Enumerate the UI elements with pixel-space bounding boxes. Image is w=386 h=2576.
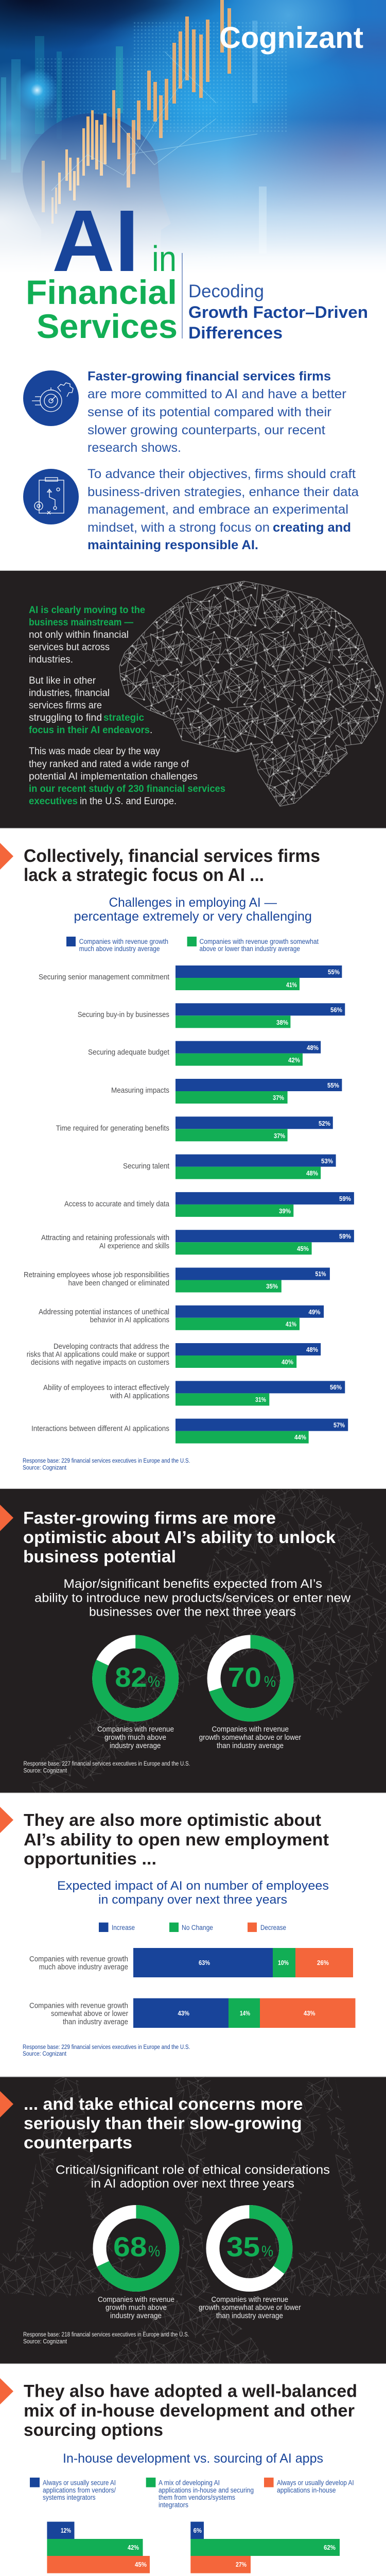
chart row labels: Securing adequate budget: [88, 1048, 169, 1057]
bar chart: challenges in employing AI: 56%: [330, 1383, 342, 1391]
text: intro paragraph 2: maintaining responsible AI.: [87, 538, 258, 552]
bar chart: slower-growing sourcing mix: [190, 2522, 340, 2576]
legend: sourcing chart: A mix of developing AI: [159, 2479, 220, 2487]
text: intro paragraph 1: research shows.: [87, 440, 181, 455]
donut chart: 68%: [99, 2212, 172, 2285]
caption: donut 35%: Companies with revenue: [211, 2296, 288, 2304]
legend: sourcing chart: Always or usually secure AI: [43, 2479, 116, 2487]
caption: donut 35%: [199, 2296, 301, 2320]
bar chart: faster-growing sourcing mix: 42%: [128, 2544, 139, 2551]
legend: sourcing chart: systems integrators: [43, 2494, 96, 2501]
subtitle: Differences: [188, 324, 283, 342]
legend: sourcing chart: [30, 2478, 354, 2509]
legend: sourcing chart: applications in-house: [277, 2486, 336, 2494]
caption: donut 68%: [98, 2296, 174, 2320]
bar chart: challenges in employing AI: 52%: [319, 1120, 330, 1127]
bar chart: challenges in employing AI: 49%: [309, 1308, 321, 1316]
legend: employees chart: [99, 1923, 286, 1932]
bar chart: faster-growing sourcing mix: 45%: [135, 2561, 147, 2568]
caption: donut 35%: than industry average: [216, 2312, 283, 2320]
chart title: employees: in company over next three years: [98, 1893, 287, 1907]
arrow: section 3 marker: [0, 1807, 13, 1833]
chart row labels: Access to accurate and timely data: [64, 1200, 170, 1209]
chart title: sourcing: In-house development vs. sourcing of AI apps: [63, 2451, 323, 2466]
text: intro paragraph 1: slower growing counterparts, our recent: [87, 423, 325, 437]
caption: donut 68%: growth much above: [106, 2304, 167, 2312]
chart row labels: Time required for generating benefits: [56, 1125, 169, 1133]
bar chart: challenges in employing AI: 37%: [273, 1094, 284, 1101]
text: AI mainstream copy: struggling to find: [29, 713, 102, 723]
heading: ethical concerns: ... and take ethical concerns more: [24, 2094, 303, 2113]
stacked bar chart: expected employee impact: 63%: [199, 1959, 210, 1967]
caption: donut 82%: [97, 1725, 174, 1750]
text: AI mainstream copy: industries.: [29, 654, 73, 665]
chart title: benefits: ability to introduce new products/services or enter new: [34, 1591, 351, 1605]
source note: ethics: Source: Cognizant: [23, 2339, 67, 2345]
bar chart: challenges in employing AI: 48%: [307, 1044, 319, 1052]
bar chart: challenges in employing AI: 41%: [286, 981, 297, 989]
title: AI in Financial Services: [26, 192, 178, 345]
stacked bar row labels: [29, 1955, 128, 2026]
source note: challenges chart: [23, 1458, 190, 1471]
donut chart: 35%: 35: [226, 2232, 260, 2263]
text: AI mainstream copy: services but across: [29, 642, 110, 653]
text: intro paragraph 1: Faster-growing financial services firms: [87, 369, 331, 383]
chart row labels: Developing contracts that address the: [54, 1343, 169, 1351]
donut chart: 35%: %: [261, 2243, 273, 2260]
text: intro paragraph 2: business-driven strategies, enhance their data: [87, 485, 359, 499]
text: AI mainstream copy: executives: [29, 796, 78, 807]
stacked bar chart: expected employee impact: 43%: [304, 2009, 315, 2017]
heading: sourcing mix: mix of in-house development and other: [24, 2401, 355, 2421]
bar chart: challenges in employing AI: 42%: [288, 1056, 300, 1064]
chart row labels: Attracting and retaining professionals with: [41, 1234, 169, 1242]
bar chart: challenges in employing AI: 40%: [282, 1358, 293, 1366]
arrow: section 2 marker: [0, 1504, 13, 1531]
title: AI in Financial Services: Financial: [26, 273, 177, 311]
stacked bar chart: expected employee impact: [29, 1948, 355, 2028]
stacked bar row labels: somewhat above or lower: [51, 2010, 128, 2018]
legend: challenges chart: much above industry average: [79, 945, 160, 953]
heading: ethical concerns: counterparts: [24, 2133, 132, 2152]
heading: ethical concerns: seriously than their slow-growing: [24, 2114, 302, 2133]
caption: donut 70%: [199, 1725, 301, 1750]
chart row labels: risks that AI applications could make or support: [27, 1351, 169, 1359]
chart row labels: Ability of employees to interact effectively: [43, 1384, 170, 1392]
bar chart: challenges in employing AI: 41%: [286, 1320, 296, 1328]
title: AI in Financial Services: AI: [52, 192, 139, 290]
text: AI mainstream copy: industries, financial: [29, 688, 110, 699]
heading: strategic focus: lack a strategic focus on AI ...: [24, 865, 264, 885]
chart row labels: Retraining employees whose job responsibilities: [24, 1271, 169, 1279]
chart title: ethics: [56, 2163, 330, 2191]
legend: employees chart: Increase: [112, 1924, 135, 1931]
bar chart: challenges in employing AI: 51%: [315, 1270, 326, 1278]
caption: donut 35%: growth somewhat above or lower: [199, 2304, 301, 2312]
chart title: ethics: in AI adoption over next three years: [91, 2177, 294, 2191]
source note: employees: Source: Cognizant: [23, 2051, 67, 2057]
chart row labels: with AI applications: [110, 1392, 169, 1400]
head silhouette: [23, 113, 171, 273]
chart title: challenges: [74, 895, 312, 924]
text: AI mainstream copy: But like in other: [29, 675, 96, 686]
chart row labels: have been changed or eliminated: [68, 1279, 169, 1287]
source note: benefits: [24, 1761, 190, 1774]
title: AI in Financial Services: Services: [37, 307, 178, 345]
bar chart: challenges in employing AI: 56%: [330, 1006, 342, 1014]
legend: challenges chart: Companies with revenue growth somewhat: [200, 938, 319, 945]
source note: challenges chart: Response base: 229 financial services executives in Europe and the U.S.: [23, 1458, 190, 1464]
chart title: benefits: businesses over the next three years: [89, 1605, 296, 1619]
heading: ethical concerns: [24, 2094, 303, 2152]
text: AI mainstream copy: potential AI implementation challenges: [29, 771, 198, 782]
panel: dark brain intro: [0, 570, 386, 828]
caption: donut 68%: Companies with revenue: [98, 2296, 174, 2304]
donut chart: 70%: %: [264, 1673, 276, 1690]
bar chart: challenges in employing AI: 39%: [279, 1207, 291, 1215]
bar chart: challenges in employing AI: 55%: [328, 968, 340, 976]
chart title: benefits: Major/significant benefits expected from AI’s: [63, 1577, 322, 1591]
legend: employees chart: No Change: [182, 1924, 213, 1931]
title: AI in Financial Services: in: [152, 239, 177, 279]
panel: dark ethical concerns: [0, 2076, 386, 2364]
heading: employment opportunities: opportunities ...: [24, 1849, 156, 1868]
icon: speed gauge and gear: [23, 370, 79, 426]
heading: employment opportunities: They are also more optimistic about: [24, 1810, 321, 1829]
chart row labels: behavior in AI applications: [90, 1316, 169, 1324]
chart title: benefits: [34, 1577, 351, 1619]
text: AI mainstream copy: AI is clearly moving to the: [29, 605, 145, 616]
donut chart: 70%: 70: [228, 1662, 261, 1693]
source note: ethics: Response base: 218 financial services executives in Europe and the U.S.: [23, 2332, 189, 2338]
stacked bar chart: expected employee impact: 26%: [317, 1959, 329, 1967]
legend: employees chart: Decrease: [260, 1924, 286, 1931]
caption: donut 68%: industry average: [110, 2312, 162, 2320]
text: intro paragraph 2: mindset, with a strong focus on: [87, 520, 270, 535]
chart row labels: decisions with negative impacts on customers: [31, 1359, 169, 1367]
caption: donut 82%: growth much above: [104, 1734, 166, 1742]
bar chart: challenges in employing AI: 57%: [334, 1421, 345, 1429]
stacked bar chart: expected employee impact: 10%: [278, 1959, 289, 1967]
text: AI mainstream copy: [29, 605, 225, 807]
bar chart: faster-growing sourcing mix: 12%: [61, 2527, 71, 2534]
donut chart: 68%: %: [148, 2243, 160, 2260]
text: intro paragraph 1: sense of its potential compared with their: [87, 405, 331, 419]
chart row labels: Securing buy-in by businesses: [78, 1011, 169, 1019]
chart row labels: Addressing potential instances of unethical: [39, 1308, 169, 1316]
subtitle: Growth Factor–Driven: [188, 303, 368, 321]
logo: Cognizant: Cognizant: [219, 21, 363, 55]
chart row labels: Interactions between different AI applications: [31, 1425, 169, 1433]
bar chart: challenges in employing AI: [24, 965, 354, 1444]
legend: sourcing chart: applications from vendors/: [43, 2486, 116, 2494]
heading: employment opportunities: [24, 1810, 329, 1868]
source note: benefits: Source: Cognizant: [24, 1768, 67, 1774]
bar chart: slower-growing sourcing mix: 62%: [324, 2544, 336, 2551]
donut chart: 82%: [99, 1641, 172, 1715]
bar chart: slower-growing sourcing mix: 6%: [194, 2527, 202, 2534]
text: AI mainstream copy: they ranked and rated a wide range of: [29, 759, 189, 770]
text: intro paragraph 1: are more committed to AI and have a better: [87, 387, 346, 401]
text: AI mainstream copy: in our recent study of 230 financial services: [29, 784, 225, 794]
chart row labels: Measuring impacts: [111, 1087, 169, 1095]
text: AI mainstream copy: focus in their AI endeavors: [29, 725, 150, 736]
stacked bar row labels: than industry average: [63, 2018, 128, 2026]
chart row labels: Securing senior management commitment: [39, 973, 169, 981]
source note: challenges chart: Source: Cognizant: [23, 1465, 67, 1471]
source note: employees: [23, 2044, 190, 2057]
brain network illustration: [116, 577, 386, 809]
source note: ethics: [23, 2332, 189, 2345]
stacked bar row labels: Companies with revenue growth: [29, 1955, 128, 1963]
chart title: ethics: Critical/significant role of ethical considerations: [56, 2163, 330, 2177]
bar chart: challenges in employing AI: 31%: [255, 1396, 266, 1403]
text: AI mainstream copy: in the U.S. and Europe.: [80, 796, 177, 807]
text: intro paragraph 2: management, and embrace an experimental: [87, 502, 348, 517]
bar chart: faster-growing sourcing mix: [47, 2522, 165, 2576]
legend: sourcing chart: applications in-house and securing: [159, 2486, 254, 2494]
donut chart: 68%: 68: [113, 2232, 147, 2263]
text: AI mainstream copy: services firms are: [29, 700, 102, 711]
heading: employment opportunities: AI’s ability to open new employment: [24, 1830, 329, 1849]
heading: faster-growing firms: optimistic about AI’s ability to unlock: [23, 1528, 336, 1547]
arrow: section 4 marker: [0, 2091, 13, 2117]
stacked bar chart: expected employee impact: 14%: [240, 2009, 250, 2017]
chart title: challenges: percentage extremely or very challenging: [74, 909, 312, 924]
donut chart: 82%: %: [148, 1673, 160, 1690]
text: AI mainstream copy: business mainstream —: [29, 617, 133, 628]
heading: sourcing mix: They also have adopted a well-balanced: [24, 2382, 357, 2401]
stacked bar row labels: Companies with revenue growth: [29, 2002, 128, 2010]
hero image: financial charts and head: [0, 0, 386, 324]
chart row labels: Securing talent: [123, 1162, 169, 1171]
text: intro paragraph 2: creating and: [273, 520, 351, 535]
donut chart: 70%: [214, 1641, 287, 1715]
text: AI mainstream copy: strategic: [103, 713, 144, 723]
bar chart: challenges in employing AI: 55%: [327, 1081, 339, 1089]
bar chart: challenges in employing AI: 45%: [297, 1245, 309, 1252]
chart row labels: AI experience and skills: [99, 1242, 169, 1250]
donut chart: 82%: 82: [115, 1662, 147, 1693]
stacked bar row labels: much above industry average: [39, 1963, 128, 1971]
text: intro paragraph 2: [87, 467, 359, 552]
legend: sourcing chart: Always or usually develop AI: [277, 2479, 354, 2487]
caption: donut 82%: Companies with revenue: [97, 1725, 174, 1734]
caption: donut 70%: growth somewhat above or lower: [199, 1734, 301, 1742]
chart title: employees: [57, 1879, 329, 1907]
bar chart: challenges in employing AI: 35%: [266, 1282, 278, 1290]
text: intro paragraph 2: To advance their objectives, firms should craft: [87, 467, 356, 481]
caption: donut 82%: industry average: [110, 1742, 161, 1750]
text: AI mainstream copy: .: [150, 725, 152, 736]
subtitle: Decoding: [188, 281, 264, 301]
heading: strategic focus: [24, 846, 320, 885]
chart title: challenges: Challenges in employing AI —: [109, 895, 277, 910]
source note: employees: Response base: 229 financial services executives in Europe and the U.S.: [23, 2044, 190, 2050]
bar chart: challenges in employing AI: 37%: [274, 1132, 285, 1140]
heading: faster-growing firms: Faster-growing firms are more: [23, 1509, 276, 1528]
bar chart: challenges in employing AI: 48%: [306, 1170, 318, 1177]
legend: sourcing chart: integrators: [159, 2501, 188, 2509]
caption: donut 70%: than industry average: [217, 1742, 284, 1750]
heading: faster-growing firms: [23, 1509, 336, 1566]
bar chart: slower-growing sourcing mix: 27%: [236, 2561, 247, 2568]
heading: faster-growing firms: business potential: [23, 1547, 176, 1566]
bar chart: challenges in employing AI: 53%: [321, 1157, 333, 1165]
legend: challenges chart: above or lower than industry average: [200, 945, 300, 953]
bar chart: challenges in employing AI: 59%: [339, 1195, 351, 1202]
text: intro paragraph 1: [87, 369, 346, 455]
subtitle: [188, 281, 368, 342]
source note: benefits: Response base: 227 financial services executives in Europe and the U.S.: [24, 1761, 190, 1767]
bar chart: challenges in employing AI: 48%: [306, 1346, 318, 1353]
heading: sourcing mix: sourcing options: [24, 2420, 163, 2440]
arrow: section 5 marker: [0, 2378, 13, 2404]
legend: sourcing chart: them from vendors/systems: [159, 2494, 235, 2501]
chart title: employees: Expected impact of AI on number of employees: [57, 1879, 329, 1893]
bar chart: challenges in employing AI: 44%: [294, 1433, 306, 1441]
donut chart: 35%: [213, 2212, 286, 2285]
panel: dark optimistic business potential: [0, 1488, 386, 1793]
text: AI mainstream copy: not only within financial: [29, 630, 129, 640]
stacked bar chart: expected employee impact: 43%: [178, 2009, 189, 2017]
heading: strategic focus: Collectively, financial services firms: [24, 846, 320, 866]
bar chart: challenges in employing AI: 38%: [276, 1019, 288, 1026]
icon: clipboard with gear: [23, 469, 79, 524]
caption: donut 70%: Companies with revenue: [212, 1725, 289, 1734]
legend: challenges chart: [66, 937, 319, 953]
arrow: section 1 marker: [0, 843, 13, 870]
text: AI mainstream copy: This was made clear by the way: [29, 746, 160, 757]
chart row labels: [24, 973, 170, 1433]
legend: challenges chart: Companies with revenue growth: [79, 938, 168, 945]
bar chart: challenges in employing AI: 59%: [339, 1232, 351, 1240]
heading: sourcing mix: [24, 2382, 357, 2440]
